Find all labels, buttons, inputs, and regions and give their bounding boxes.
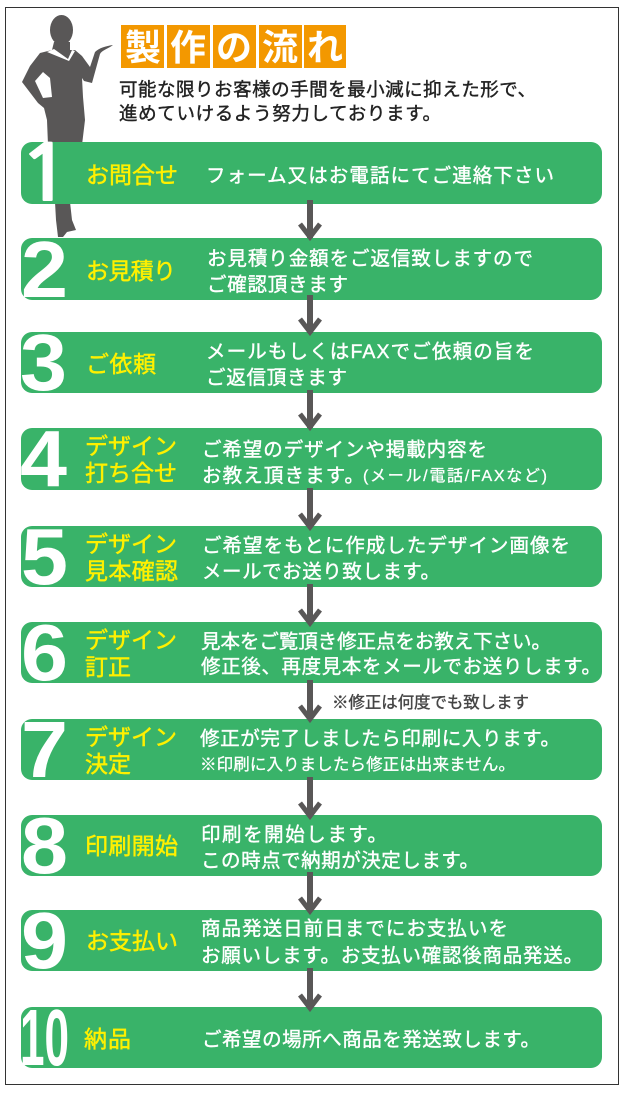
- arrow 4: [300, 488, 320, 527]
- step 4: [20, 414, 602, 503]
- step 8: この時点で納期が決定します。: [201, 850, 479, 872]
- arrows between steps: [300, 200, 320, 1008]
- step 10: ご希望の場所へ商品を発送致します。: [202, 1029, 540, 1051]
- step 4: (メール/電話/FAXなど): [363, 467, 547, 485]
- title: 製作の流れ: 製: [125, 27, 161, 68]
- step 6: [21, 608, 602, 697]
- arrow 1: [300, 200, 320, 238]
- step 6: 6: [21, 608, 68, 697]
- step 8: 印刷開始: [85, 833, 178, 859]
- step 5: メールでお送り致します。: [202, 561, 440, 583]
- step 8: 印刷を開始します。: [201, 824, 387, 846]
- step 1: お問合せ: [86, 162, 178, 188]
- step 8: 8: [21, 801, 68, 890]
- step 9: 9: [21, 896, 68, 985]
- title: 製作の流れ: の: [216, 27, 252, 68]
- arrow 8: [300, 872, 320, 911]
- step 5: 見本確認: [85, 558, 178, 584]
- title: 製作の流れ: [121, 25, 346, 68]
- step 7: 決定: [85, 751, 131, 777]
- step 2: お見積り金額をご返信致しますので: [207, 248, 533, 270]
- arrow 3: [300, 390, 320, 428]
- step 6: 訂正: [85, 654, 131, 680]
- step 4: 打ち合せ: [85, 460, 177, 486]
- title: 製作の流れ: れ: [307, 27, 343, 68]
- step 3: ご返信頂きます: [206, 367, 347, 389]
- arrow 6: [300, 680, 320, 719]
- step 7: 修正が完了しましたら印刷に入ります。: [200, 728, 560, 750]
- step 3: [20, 318, 602, 407]
- step 2: お見積り: [86, 258, 176, 284]
- step 8: [21, 801, 602, 890]
- arrow 2: [300, 295, 320, 333]
- step 9: お支払い: [86, 928, 178, 954]
- step 10: 納品: [84, 1026, 131, 1052]
- step 10: [20, 993, 602, 1082]
- note: 修正: ※修正は何度でも致します: [332, 693, 529, 712]
- step 4: ご希望のデザインや掲載内容を: [202, 439, 487, 461]
- step 9: お願いします。お支払い確認後商品発送。: [201, 945, 583, 967]
- step 7: [21, 705, 602, 794]
- icon: woman silhouette: [22, 15, 113, 237]
- step 2: ご確認頂きます: [207, 274, 348, 296]
- step 7: ※印刷に入りましたら修正は出来ません。: [200, 755, 515, 774]
- title: 製作の流れ: 流: [262, 27, 298, 68]
- step 9: [21, 896, 602, 985]
- intro text: [119, 79, 536, 124]
- step 5: 5: [21, 512, 68, 601]
- step 6: デザイン: [85, 627, 177, 653]
- intro text: 進めていけるよう努力しております。: [119, 103, 441, 124]
- step 3: メールもしくはFAXでご依頼の旨を: [206, 341, 534, 363]
- step 1: フォーム又はお電話にてご連絡下さい: [206, 165, 554, 187]
- step 7: 7: [21, 705, 68, 794]
- step 6: 修正後、再度見本をメールでお送りします。: [201, 656, 601, 678]
- step 1: 1: [17, 135, 74, 213]
- arrow 7: [300, 777, 320, 816]
- step 10: 10: [20, 993, 69, 1082]
- arrow 9: [300, 968, 320, 1008]
- title: 製作の流れ: 作: [170, 27, 206, 68]
- step 4: 4: [20, 414, 68, 503]
- step 4: デザイン: [85, 433, 177, 459]
- step 9: 商品発送日前日までにお支払いを: [201, 918, 508, 940]
- step 3: 3: [20, 318, 67, 407]
- step 1: [17, 135, 602, 213]
- step 7: デザイン: [85, 724, 177, 750]
- arrow 5: [300, 584, 320, 623]
- intro text: 可能な限りお客様の手間を最小減に抑えた形で、: [119, 79, 536, 100]
- step 6: 見本をご覧頂き修正点をお教え下さい。: [201, 631, 551, 653]
- step 4: お教え頂きます。: [202, 465, 364, 487]
- step 5: デザイン: [85, 531, 177, 557]
- step 5: [21, 512, 602, 601]
- step 2: 2: [21, 225, 68, 314]
- step 2: [21, 225, 602, 314]
- step 3: ご依頼: [86, 351, 156, 377]
- step 5: ご希望をもとに作成したデザイン画像を: [202, 535, 570, 557]
